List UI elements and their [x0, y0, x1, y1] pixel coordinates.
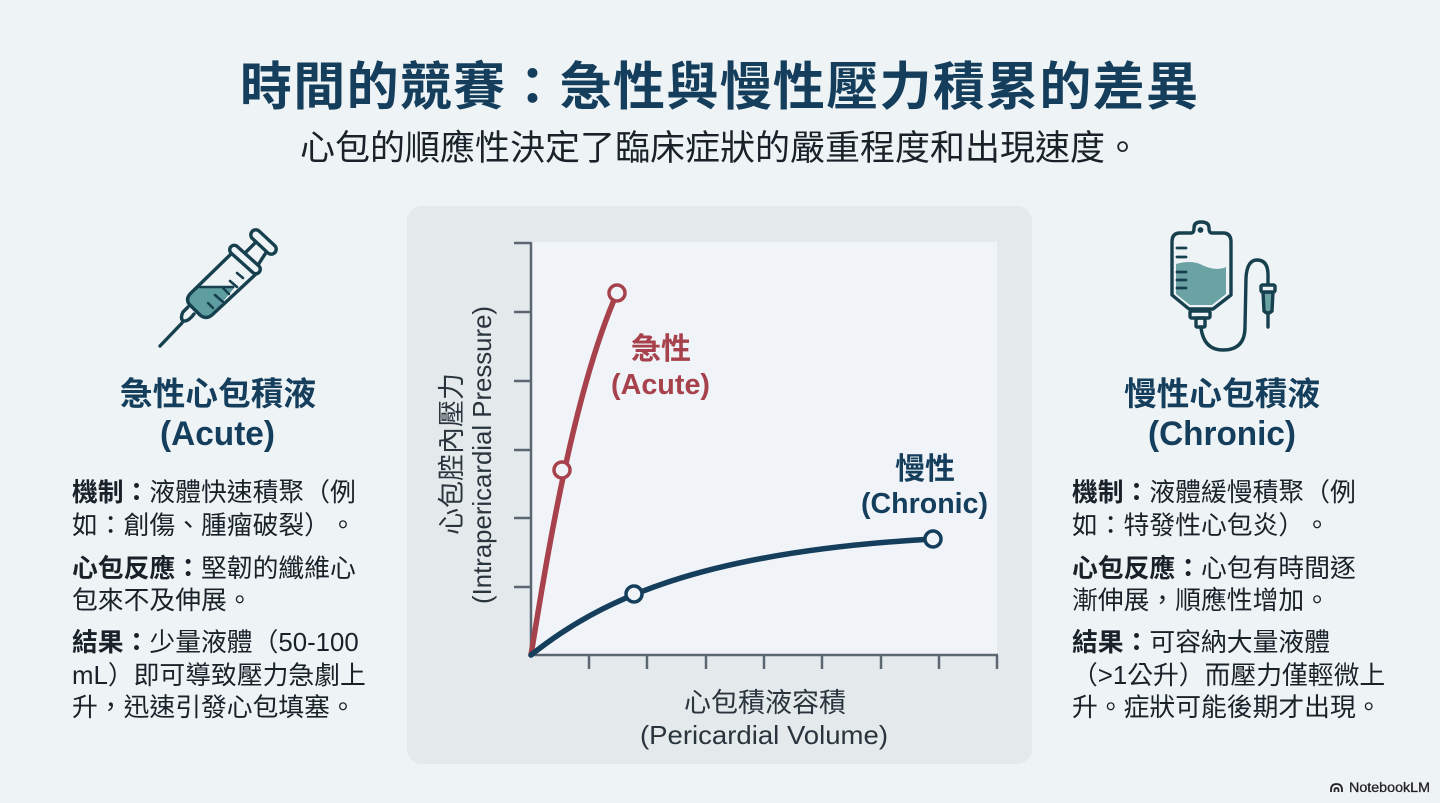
label: acute curve: (Acute) [611, 369, 710, 401]
y axis label: (Intrapericardial Pressure) [467, 306, 497, 604]
line chart: axes [514, 242, 998, 669]
label: chronic curve: (Chronic) [861, 488, 988, 520]
text block: acute pericardial response: 心包反應：堅韌的纖維心 [72, 553, 356, 583]
watermark: NotebookLM: NotebookLM [1349, 780, 1430, 795]
label: acute curve [611, 333, 710, 401]
text block: acute result [72, 628, 366, 722]
heading: acute [120, 376, 316, 453]
text block: chronic result: 升。症狀可能後期才出現。 [1072, 693, 1382, 722]
curve: acute [531, 285, 625, 655]
text block: chronic mechanism [1072, 478, 1356, 540]
text block: acute result: mL）即可導致壓力急劇上 [72, 661, 366, 690]
panel: left, acute [72, 376, 366, 722]
heading: chronic: 慢性心包積液 [1124, 376, 1320, 412]
title: 時間的競賽：急性與慢性壓力積累的差異 [240, 59, 1198, 117]
y axis label: 心包腔內壓力 [437, 373, 467, 535]
text block: acute pericardial response: 包來不及伸展。 [72, 586, 253, 615]
text block: chronic result [1072, 628, 1385, 722]
label: chronic curve [861, 453, 988, 520]
text block: chronic pericardial response [1072, 553, 1356, 615]
x axis label [640, 688, 888, 750]
x axis label: 心包積液容積 [684, 688, 846, 718]
panel: right, chronic [1072, 376, 1385, 722]
text block: chronic pericardial response: 漸伸展，順應性增加。 [1072, 586, 1330, 615]
text block: chronic pericardial response: 心包反應：心包有時間逐 [1072, 553, 1356, 583]
plot area [531, 242, 997, 655]
text block: acute result: 升，迅速引發心包填塞。 [72, 693, 356, 722]
text block: acute result: 結果：少量液體（50-100 [72, 628, 359, 657]
curve: chronic [531, 531, 941, 655]
text block: chronic result: 結果：可容納大量液體 [1072, 628, 1330, 657]
subtitle: 心包的順應性決定了臨床症狀的嚴重程度和出現速度。 [300, 129, 1140, 168]
text block: chronic mechanism: 機制：液體緩慢積聚（例 [1072, 478, 1356, 507]
label: acute curve: 急性 [631, 333, 691, 366]
x axis label: (Pericardial Volume) [640, 720, 888, 750]
text block: acute mechanism [72, 478, 356, 540]
text block: acute mechanism: 機制：液體快速積聚（例 [72, 478, 356, 507]
heading: chronic: (Chronic) [1148, 415, 1296, 453]
text block: chronic mechanism: 如：特發性心包炎）。 [1072, 511, 1330, 540]
heading: chronic [1124, 376, 1320, 453]
y axis label [437, 306, 497, 604]
panel: chart background [407, 206, 1032, 764]
label: chronic curve: 慢性 [895, 453, 955, 486]
heading: acute: 急性心包積液 [120, 376, 316, 412]
text block: acute mechanism: 如：創傷、腫瘤破裂）。 [72, 511, 356, 540]
icon: IV bag [1172, 222, 1275, 350]
heading: acute: (Acute) [160, 415, 275, 453]
icon: syringe [160, 228, 278, 346]
text block: acute pericardial response [72, 553, 356, 615]
text block: chronic result: （>1公升）而壓力僅輕微上 [1072, 661, 1385, 690]
